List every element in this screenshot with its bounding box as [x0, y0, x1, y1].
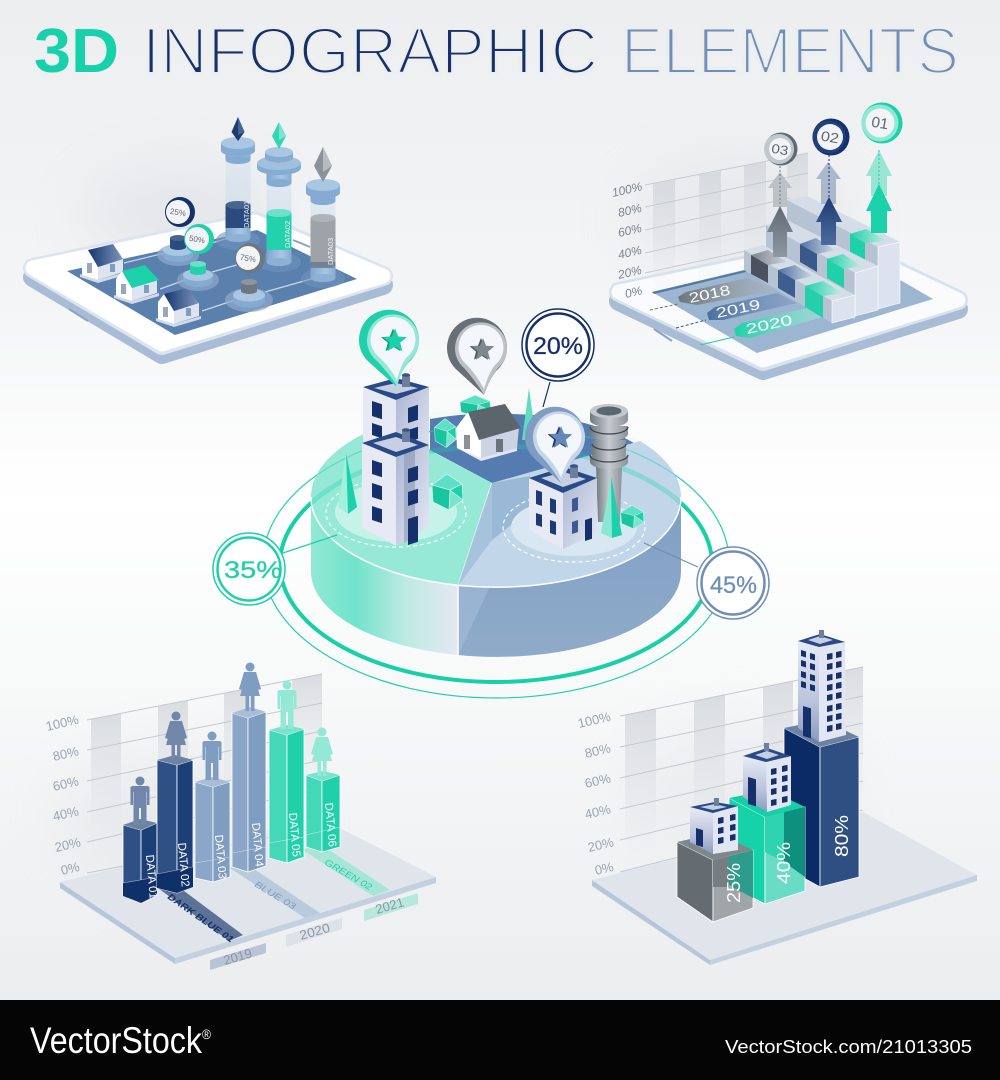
bar DATA 06	[306, 728, 340, 852]
callout 35%: 35%	[224, 557, 282, 584]
floor	[592, 812, 977, 965]
axis labels: 0%	[59, 859, 81, 878]
tube DATA03	[301, 147, 345, 288]
axis labels	[576, 709, 615, 878]
grid	[87, 674, 322, 873]
building on box 25%	[690, 798, 738, 854]
thin outer ring	[263, 426, 729, 698]
small cylinder 25%	[157, 235, 199, 266]
chart grid columns	[645, 153, 808, 296]
axis labels: 80%	[583, 740, 612, 761]
year 2020: 2020	[298, 920, 332, 943]
bar DATA 05	[269, 680, 304, 863]
pie side: teal	[311, 497, 458, 655]
badge 02: 02	[820, 128, 840, 146]
house 3	[156, 288, 201, 327]
slice: 20% dark blue	[430, 414, 640, 483]
bar DATA 03: DATA 03	[212, 834, 228, 879]
cone: centre back	[522, 388, 536, 440]
tube DATA01: DATA01	[242, 201, 251, 228]
tower on box 80%	[798, 630, 846, 742]
staircase middle row	[766, 220, 878, 320]
year 2021	[364, 893, 418, 921]
year 2020	[286, 918, 342, 947]
badge 25%: 25%	[169, 207, 187, 218]
thick ring	[280, 446, 712, 682]
floor	[60, 818, 436, 964]
axis labels: 20%	[586, 834, 615, 855]
badge 01	[862, 102, 902, 144]
small building	[529, 464, 597, 549]
tablet body	[33, 221, 383, 354]
pin: teal	[359, 310, 419, 386]
tablet body	[619, 245, 958, 370]
axis labels	[611, 179, 644, 301]
strip: blue 03: BLUE 03	[253, 879, 298, 911]
panel: central pie chart	[213, 309, 769, 698]
box 80%	[784, 720, 859, 887]
ribbon 2018	[650, 278, 777, 310]
arrow 01	[866, 150, 892, 233]
bar DATA 05: DATA 05	[286, 812, 302, 857]
ribbon 2020	[700, 308, 823, 345]
connector lines	[124, 238, 318, 311]
small cylinder 75%	[225, 279, 273, 312]
callout 45%	[697, 547, 769, 619]
slice: 35% teal	[311, 413, 492, 586]
axis labels: 40%	[51, 803, 80, 824]
panel: buildings bar chart	[576, 630, 977, 965]
bar DATA 03	[195, 732, 230, 882]
badge 50%	[184, 224, 214, 254]
tube DATA03: DATA03	[326, 238, 335, 265]
gem: teal large	[432, 474, 463, 510]
cone: right	[601, 477, 622, 538]
small cylinder 50%	[177, 261, 219, 291]
badge 50%: 50%	[188, 234, 206, 245]
building on box 40%	[743, 743, 791, 812]
strip: blue 03	[230, 863, 320, 918]
axis labels: 40%	[617, 243, 643, 262]
house centre	[456, 404, 521, 461]
axis labels: 100%	[576, 709, 613, 731]
axis labels: 20%	[53, 834, 82, 855]
badge 75%	[235, 243, 265, 273]
slice: 45% blue	[311, 441, 681, 656]
callout 45%: 45%	[710, 572, 757, 599]
box 40%	[729, 790, 805, 904]
callout 20%	[522, 309, 594, 381]
bar DATA 04: DATA 04	[249, 822, 265, 868]
callout line 45%	[644, 543, 698, 567]
ribbon 2020: 2020	[744, 311, 794, 337]
upper block	[363, 373, 429, 470]
tube DATA02: DATA02	[283, 221, 292, 248]
tower	[590, 404, 628, 522]
screen	[652, 248, 933, 353]
panel: tablet with staircase chart	[611, 102, 958, 370]
callout 35%	[213, 533, 285, 605]
pie side: blue	[458, 497, 681, 657]
box 40%: 40%	[774, 842, 794, 884]
year 2019	[210, 943, 266, 970]
grid	[620, 667, 863, 872]
gem: back	[460, 395, 491, 417]
axis labels	[44, 712, 82, 878]
arrow 03	[767, 166, 793, 257]
watermark right: VectorStock.com/21013305	[725, 1036, 972, 1057]
panel: people bar chart	[44, 662, 436, 970]
bar DATA 06: DATA 06	[322, 802, 338, 847]
panel: tablet with houses and tubes	[33, 117, 383, 354]
screen	[67, 230, 357, 335]
axis labels: 100%	[611, 179, 644, 200]
axis labels: 80%	[617, 201, 643, 220]
title	[34, 14, 959, 88]
ribbon 2019: 2019	[714, 296, 762, 321]
axis labels: 80%	[51, 743, 80, 764]
tall building	[362, 373, 429, 546]
badge 03: 03	[770, 141, 790, 158]
badge 02	[812, 118, 850, 156]
arrow 02	[816, 155, 842, 245]
axis labels: 100%	[44, 712, 81, 734]
strip: dark blue 01	[158, 882, 243, 944]
callout line 35%	[283, 535, 337, 553]
staircase front row	[744, 245, 855, 323]
cone: left	[338, 453, 357, 514]
gem: left of house	[434, 419, 456, 447]
box 25%	[677, 833, 753, 922]
title: 3D	[34, 17, 119, 86]
callout line 20%	[543, 382, 550, 407]
strip: dark blue 01: DARK BLUE 01	[166, 891, 235, 944]
box 25%: 25%	[724, 863, 744, 903]
callout 20%: 20%	[533, 333, 583, 360]
gem: right	[621, 505, 644, 529]
bar DATA 01: DATA 01	[143, 854, 159, 899]
bar DATA 04	[232, 662, 266, 872]
badge 03	[764, 132, 798, 166]
ribbon 2019	[676, 293, 797, 328]
year 2021: 2021	[374, 894, 406, 917]
ribbon 2018: 2018	[687, 281, 732, 306]
watermark left: VectorStock	[30, 1020, 227, 1061]
title: INFOGRAPHIC	[142, 14, 598, 88]
box 80%: 80%	[832, 815, 852, 857]
badge 25%	[165, 197, 195, 227]
axis labels: 60%	[583, 770, 612, 791]
strip: green 02: GREEN 02	[323, 857, 374, 892]
watermark left: ®	[202, 1026, 212, 1042]
axis labels: 60%	[51, 773, 80, 794]
axis labels: 60%	[617, 221, 643, 240]
house 2	[114, 265, 159, 304]
bar DATA 01	[123, 776, 159, 903]
axis labels: 40%	[583, 801, 612, 822]
badge 75%: 75%	[239, 253, 257, 264]
tube DATA01	[216, 117, 260, 250]
strip: green 02	[303, 844, 390, 896]
year 2019: 2019	[222, 945, 254, 968]
lower block	[362, 428, 429, 546]
bar DATA 02	[157, 712, 193, 893]
axis labels: 20%	[616, 263, 643, 282]
pin: blue	[525, 407, 585, 483]
glass back rim with rings showing through	[312, 414, 680, 584]
pin: grey	[447, 318, 507, 395]
axis labels: 0%	[593, 859, 615, 878]
tube DATA02	[257, 122, 301, 272]
title: ELEMENTS	[621, 14, 959, 88]
axis labels: 0%	[624, 283, 644, 301]
footer bar	[0, 1000, 1000, 1080]
badge 01: 01	[870, 114, 890, 133]
house 1	[80, 244, 125, 283]
bar DATA 02: DATA 02	[175, 842, 191, 887]
staircase back row	[787, 196, 900, 310]
